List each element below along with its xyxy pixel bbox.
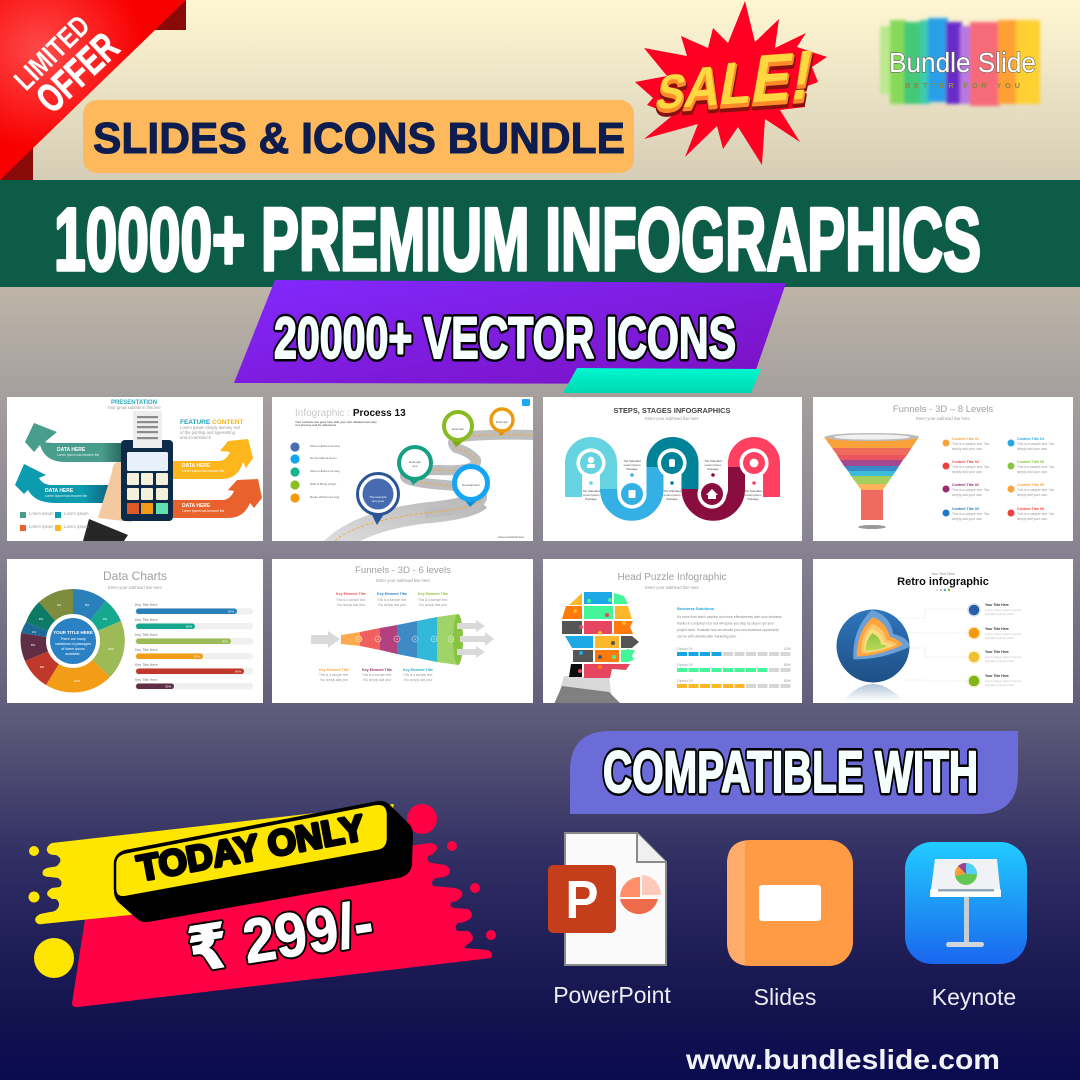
- slide thumbnail: presentation: Lorem Ipsum: [29, 511, 54, 516]
- slide thumbnail: funnels 8 levels: simply add your own.: [1017, 517, 1048, 521]
- promo: today only price: ₹ 299/-: [183, 889, 378, 986]
- icon: slides: [727, 840, 853, 966]
- slide thumbnail: presentation: Lorem Ipsum has become the: [45, 494, 87, 498]
- slide thumbnail: funnels 6 levels: 6: [450, 637, 452, 641]
- slide thumbnail: head puzzle: thanks to company! Our tool will guide you step by step to get your: [677, 622, 775, 626]
- slide thumbnail: retro infographic: Your Title Here: [985, 627, 1009, 631]
- slide thumbnail: steps and stages: Lorem Ipsum: [583, 493, 600, 497]
- slide thumbnail: data charts: 30%: [165, 684, 171, 688]
- slide thumbnail: data charts: Key Title Here: [135, 618, 158, 622]
- slide thumbnail: data charts: Key Title Here: [135, 603, 158, 607]
- slide thumbnail: process 13: text goes: [372, 499, 385, 503]
- slide thumbnail: steps and stages: The Standard: [704, 459, 722, 463]
- slide thumbnail: funnels 6 levels: This is a sample text.: [418, 598, 448, 602]
- slide thumbnail: funnels 8 levels: Content Title 05: [1017, 483, 1044, 487]
- slide thumbnail: funnels 8 levels: Content Title 02: [952, 483, 979, 487]
- slide thumbnail: funnels 8 levels: This is a sample text. You: [952, 442, 990, 446]
- slide thumbnail: funnels 6 levels: 3: [396, 637, 398, 641]
- promo: today only price: ₹ 299/-: [183, 889, 378, 986]
- slide thumbnail: data charts: 8%: [39, 617, 43, 621]
- slide thumbnail: data charts: 1%: [32, 630, 36, 634]
- slide thumbnail: process 13: of a process and its milestones: [295, 423, 337, 427]
- slide thumbnail: funnels 8 levels: simply add your own.: [1017, 447, 1048, 451]
- slide thumbnail: funnels 6 levels: Key Element Title: [377, 592, 407, 596]
- slide thumbnail: retro infographic: Lorem ipsum dolor sit amet: [985, 632, 1021, 636]
- slide thumbnail: funnels 6 levels: You simply add your: [320, 678, 349, 682]
- slide thumbnail: presentation: DATA HERE: [182, 463, 211, 469]
- slide thumbnail: head puzzle: 43%: [784, 647, 792, 651]
- purple banner: vector icons: 20000+ VECTOR ICONS: [274, 306, 736, 371]
- icon: keynote: [905, 842, 1027, 964]
- slide thumbnail: retro infographic: gravida sit amet porta: [985, 612, 1014, 616]
- slide thumbnail: steps and stages: Passage: [707, 467, 719, 471]
- purple banner: vector icons: 20000+ VECTOR ICONS: [274, 306, 736, 371]
- slide thumbnail: data charts: Key Title Here: [135, 648, 158, 652]
- slide thumbnail: retro infographic: Lorem ipsum dolor sit amet: [985, 655, 1021, 659]
- logo: bundle slide: BETTER FOR YOU: [905, 81, 1020, 90]
- slide thumbnail: presentation: Lorem Ipsum simply dummy text: [180, 425, 241, 430]
- slide thumbnail: head puzzle: Option 02: [677, 663, 693, 667]
- slide thumbnail: funnels 6 levels: This is a sample text.: [377, 598, 407, 602]
- slide thumbnail: funnels 8 levels: simply add your own.: [952, 517, 983, 521]
- sale starburst: SALE!: [652, 41, 820, 131]
- slide thumbnail: funnels 6 levels: Key Element Title: [319, 668, 349, 672]
- slide thumbnail: presentation: DATA HERE: [182, 503, 211, 509]
- slide thumbnail: data charts: 21%: [74, 679, 80, 683]
- slide thumbnail: funnels 8 levels: simply add your own.: [1017, 470, 1048, 474]
- slide thumbnail: funnels 8 levels: This is a sample text. You: [1017, 488, 1055, 492]
- slide thumbnail: data charts: 90%: [235, 670, 241, 674]
- slide thumbnail: retro infographic: Lorem ipsum dolor sit amet: [985, 608, 1021, 612]
- slide thumbnail: retro infographic: [813, 559, 1073, 703]
- slide thumbnail: presentation: DATA HERE: [45, 488, 74, 494]
- slide thumbnail: process 13: www.yourwebsite.here: [498, 535, 525, 539]
- slide thumbnail: process 13: Above Hitches as long: [310, 469, 340, 473]
- slide thumbnail: steps and stages: Lorem Ipsum: [624, 463, 641, 467]
- slide thumbnail: retro infographic: gravida sit amet porta: [985, 636, 1014, 640]
- slide thumbnail: funnels 8 levels: Content Title 06: [1017, 507, 1044, 511]
- slide thumbnail: steps and stages: [543, 397, 802, 541]
- slide thumbnail: data charts: YOUR TITLE HERE: [53, 630, 93, 635]
- slide thumbnail: steps and stages: STEPS, STAGES INFOGRAPHICS: [614, 406, 731, 415]
- slide thumbnail: process 13: Example: [452, 427, 464, 431]
- slide thumbnail: data charts: 90%: [228, 610, 234, 614]
- slide thumbnail: funnels 8 levels: Enter your subhead line here: [916, 416, 971, 421]
- slide thumbnail: data charts: There are many: [60, 637, 86, 641]
- slide thumbnail: funnels 8 levels: This is a sample text. You: [952, 512, 990, 516]
- slide thumbnail: steps and stages: The Standard: [582, 489, 600, 493]
- slide thumbnail: funnels 6 levels: Funnels - 3D - 6 levels: [355, 565, 451, 576]
- slide thumbnail: head puzzle: [543, 559, 802, 704]
- slide thumbnail: funnels 8 levels: This is a sample text. You: [952, 465, 990, 469]
- slide thumbnail: funnels 6 levels: You simply add your: [404, 678, 433, 682]
- slide thumbnail: funnels 8 levels: Content Title 03: [952, 507, 979, 511]
- slide thumbnail: funnels 6 levels: Key Element Title: [362, 668, 392, 672]
- slide thumbnail: retro infographic: Lorem ipsum dolor sit amet: [985, 679, 1021, 683]
- slide thumbnail: data charts: 80%: [222, 640, 228, 644]
- slide thumbnail: process 13: Development: [462, 483, 480, 487]
- slide thumbnail: presentation: Lorem Ipsum: [29, 524, 54, 529]
- slide thumbnail: data charts: 50%: [186, 624, 192, 628]
- slide thumbnail: steps and stages: Lorem Ipsum: [664, 493, 681, 497]
- slide thumbnail: funnels 8 levels: This is a sample text. You: [952, 488, 990, 492]
- slide thumbnail: funnels 6 levels: You simply add your: [337, 603, 366, 607]
- slide thumbnail: data charts: Key Title Here: [135, 633, 158, 637]
- slide thumbnail: presentation: and scrambled it: [180, 435, 212, 440]
- badge: slides and icons bundle: [83, 100, 634, 173]
- slide thumbnail: presentation: Lorem Ipsum: [64, 511, 89, 516]
- limited offer ribbon: OFFER: [28, 25, 128, 122]
- slide thumbnail: funnels 6 levels: 2: [377, 637, 379, 641]
- slide thumbnail: presentation: FEATURE CONTENT: [180, 419, 243, 426]
- slide thumbnail: data charts: of lorem ipsum: [61, 647, 85, 651]
- slide thumbnail: funnels 8 levels: Content Title 05: [1017, 460, 1044, 464]
- slide thumbnail: steps and stages: Lorem Ipsum: [705, 463, 722, 467]
- slide thumbnail: retro infographic: Your Text Here: [931, 572, 955, 576]
- slide thumbnail: funnels 8 levels: This is a sample text. You: [1017, 465, 1055, 469]
- promo: today only price: [28, 801, 496, 1007]
- slide thumbnail: data charts: Enter your subhead line here: [108, 585, 163, 590]
- slide thumbnail: head puzzle: It's more than teach passion and more effectiveness start your business: [677, 615, 782, 619]
- slide thumbnail: steps and stages: Passage: [626, 467, 638, 471]
- slide thumbnail: funnels 6 levels: Key Element Title: [336, 592, 366, 596]
- slide thumbnail: steps and stages: Passage: [666, 497, 678, 501]
- logo: bundle slide: Bundle Slide: [889, 47, 1036, 78]
- slide thumbnail: funnels 6 levels: This is a sample text.: [403, 673, 433, 677]
- slide thumbnail: funnels 6 levels: This is a sample text.: [319, 673, 349, 677]
- slide thumbnail: data charts: 8%: [40, 665, 44, 669]
- slide thumbnail: presentation: PRESENTATION: [111, 400, 157, 406]
- slide thumbnail: presentation: Lorem Ipsum has become the: [182, 469, 224, 473]
- slide thumbnail: steps and stages: Passage: [585, 497, 597, 501]
- slide thumbnail: funnels 8 levels: Content Title 02: [952, 460, 979, 464]
- slide thumbnail: process 13: text: [413, 464, 418, 468]
- label: powerpoint: PowerPoint: [553, 982, 671, 1008]
- slide thumbnail: presentation: [7, 397, 263, 541]
- slide thumbnail: funnels 6 levels: Key Element Title: [403, 668, 433, 672]
- promo: today only price: TODAY ONLY: [134, 807, 368, 889]
- slide thumbnail: data charts: Key Title Here: [135, 678, 158, 682]
- slide thumbnail: steps and stages: Passage: [747, 497, 759, 501]
- slide thumbnail: funnels 6 levels: You simply add your: [419, 603, 448, 607]
- slide thumbnail: retro infographic: Your Title Here: [985, 603, 1009, 607]
- slide thumbnail: funnels 8 levels: Content Title 01: [952, 437, 979, 441]
- sale starburst: SALE!: [652, 39, 820, 128]
- slide thumbnail: data charts: 8%: [31, 643, 35, 647]
- slide thumbnail: process 13: Infographic : Process 13: [295, 408, 406, 419]
- slide thumbnail: process 13: Above Hitches as long: [310, 444, 340, 448]
- slide thumbnail: presentation: DATA HERE: [57, 447, 86, 453]
- slide thumbnail: retro infographic: Your Title Here: [985, 650, 1009, 654]
- slide thumbnail: process 13: Example: [409, 460, 421, 464]
- slide thumbnail: retro infographic: gravida sit amet porta: [985, 659, 1014, 663]
- slide thumbnail: data charts: 20%: [108, 647, 114, 651]
- slide thumbnail: data charts: available.: [65, 652, 81, 656]
- slide thumbnail: funnels 6 levels: You simply add your: [378, 603, 407, 607]
- slide thumbnail: data charts: 55%: [194, 654, 200, 658]
- slide thumbnail: head puzzle: 60%: [784, 679, 792, 683]
- slide thumbnail: steps and stages: Enter your subhead line here: [645, 416, 700, 421]
- slide thumbnail: process 13: Your example text goes here with your own detailed summary: [295, 420, 377, 424]
- slide thumbnail: data charts: 9%: [103, 617, 107, 621]
- slide thumbnail: funnels 6 levels: Key Element Title: [418, 592, 448, 596]
- slide thumbnail: data charts: Data Charts: [103, 569, 167, 583]
- slide thumbnail: data charts: 8%: [85, 603, 89, 607]
- sale starburst: SALE!: [652, 36, 819, 125]
- slide thumbnail: funnels 6 levels: 4: [414, 637, 416, 641]
- banner: compatible with: [570, 731, 1018, 814]
- slide thumbnail: presentation: Your great subtitle in this line: [107, 405, 161, 410]
- slide thumbnail: head puzzle: project done. Evaluate how successful your new business opportunity: [677, 628, 779, 632]
- slide thumbnail: steps and stages: Lorem Ipsum: [745, 493, 762, 497]
- slide thumbnail: data charts: Key Title Here: [135, 663, 158, 667]
- slide thumbnail: funnels 8 levels: This is a sample text. You: [1017, 512, 1055, 516]
- slide thumbnail: presentation: Lorem Ipsum has become the: [57, 453, 99, 457]
- label: keynote: Keynote: [932, 984, 1016, 1010]
- slide thumbnail: funnels 8 levels: Content Title 04: [1017, 437, 1044, 441]
- slide thumbnail: process 13: Wolf at Bring a 5gm: [310, 482, 337, 486]
- slide thumbnail: process 13: Example: [496, 420, 508, 424]
- slide thumbnail: process 13: Route Hitches as long: [310, 495, 340, 499]
- limited offer ribbon: [0, 0, 186, 180]
- slide thumbnail: head puzzle: 80%: [784, 663, 792, 667]
- icon: powerpoint: [548, 833, 666, 965]
- slide thumbnail: process 13: The example: [369, 495, 387, 499]
- slide thumbnail: funnels 8 levels: simply add your own.: [952, 493, 983, 497]
- slide thumbnail: retro infographic: Retro infographic: [897, 576, 989, 588]
- slide thumbnail: head puzzle: can be with unbelievable marketing plan.: [677, 634, 737, 638]
- badge: slides and icons bundle: SLIDES & ICONS BUNDLE: [93, 114, 625, 163]
- slide thumbnail: funnels 6 levels: You simply add your: [363, 678, 392, 682]
- slide thumbnail: data charts: variations of passages: [55, 642, 91, 646]
- slide thumbnail: retro infographic: Your Title Here: [985, 674, 1009, 678]
- slide thumbnail: funnels 6 levels: 5: [433, 637, 435, 641]
- slide thumbnail: presentation: Lorem Ipsum: [64, 524, 89, 529]
- slide thumbnail: funnels 6 levels: This is a sample text.: [362, 673, 392, 677]
- icon: powerpoint: P: [566, 870, 598, 930]
- slide thumbnail: head puzzle: Option 01: [677, 647, 693, 651]
- label: slides: Slides: [754, 984, 816, 1010]
- slide thumbnail: head puzzle: Enter your subhead line here: [645, 585, 700, 590]
- slide thumbnail: funnels 8 levels: simply add your own.: [952, 447, 983, 451]
- slide thumbnail: funnels 6 levels: 1: [358, 637, 360, 641]
- slide thumbnail: presentation: of the printing and typesetting: [180, 430, 236, 435]
- slide thumbnail: steps and stages: The Standard: [623, 459, 641, 463]
- slide thumbnail: process 13: He hit nails at lorem: [310, 456, 337, 460]
- slide thumbnail: funnels 8 levels: simply add your own.: [1017, 493, 1048, 497]
- slide thumbnail: head puzzle: Option 03: [677, 679, 693, 683]
- website url: www.bundleslide.com: [685, 1044, 1000, 1075]
- slide thumbnail: head puzzle: Business Solutions: [677, 606, 715, 611]
- slide thumbnail: funnels 8 levels: Funnels - 3D – 8 Levels: [893, 404, 993, 415]
- purple banner: vector icons: [234, 280, 786, 393]
- slide thumbnail: funnels 6 levels: [272, 559, 533, 703]
- logo: bundle slide: [880, 18, 1040, 106]
- slide thumbnail: funnels 8 levels: simply add your own.: [952, 470, 983, 474]
- slide thumbnail: steps and stages: The Standard: [663, 489, 681, 493]
- sale starburst: [635, 1, 827, 165]
- slide thumbnail: head puzzle: Head Puzzle Infographic: [618, 572, 726, 583]
- slide thumbnail: funnels 6 levels: This is a sample text.: [336, 598, 366, 602]
- slide thumbnail: presentation: Lorem Ipsum has become the: [182, 509, 224, 513]
- slide thumbnail: funnels 6 levels: Enter your subhead line here: [376, 578, 431, 583]
- slide thumbnail: process 13: [272, 397, 535, 555]
- slide thumbnail: steps and stages: The Standard: [744, 489, 762, 493]
- slide thumbnail: data charts: 9%: [57, 603, 61, 607]
- slide thumbnail: funnels 8 levels: This is a sample text. You: [1017, 442, 1055, 446]
- slide thumbnail: data charts: [7, 559, 263, 703]
- slide thumbnail: funnels 8 levels: [813, 397, 1073, 541]
- slide thumbnail: retro infographic: gravida sit amet porta: [985, 683, 1014, 687]
